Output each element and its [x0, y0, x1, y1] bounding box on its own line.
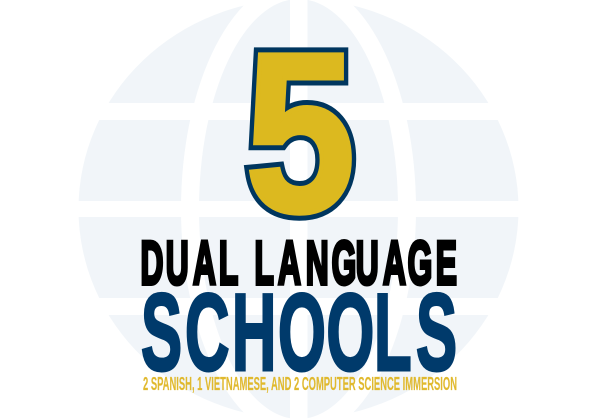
heading: dual language: DUAL LANGUAGE — [141, 230, 457, 298]
big number 5: 5 — [245, 6, 355, 260]
big number 5: 5 — [245, 6, 355, 260]
heading: schools: SCHOOLS — [141, 270, 457, 393]
icon: background globe — [60, 0, 540, 420]
